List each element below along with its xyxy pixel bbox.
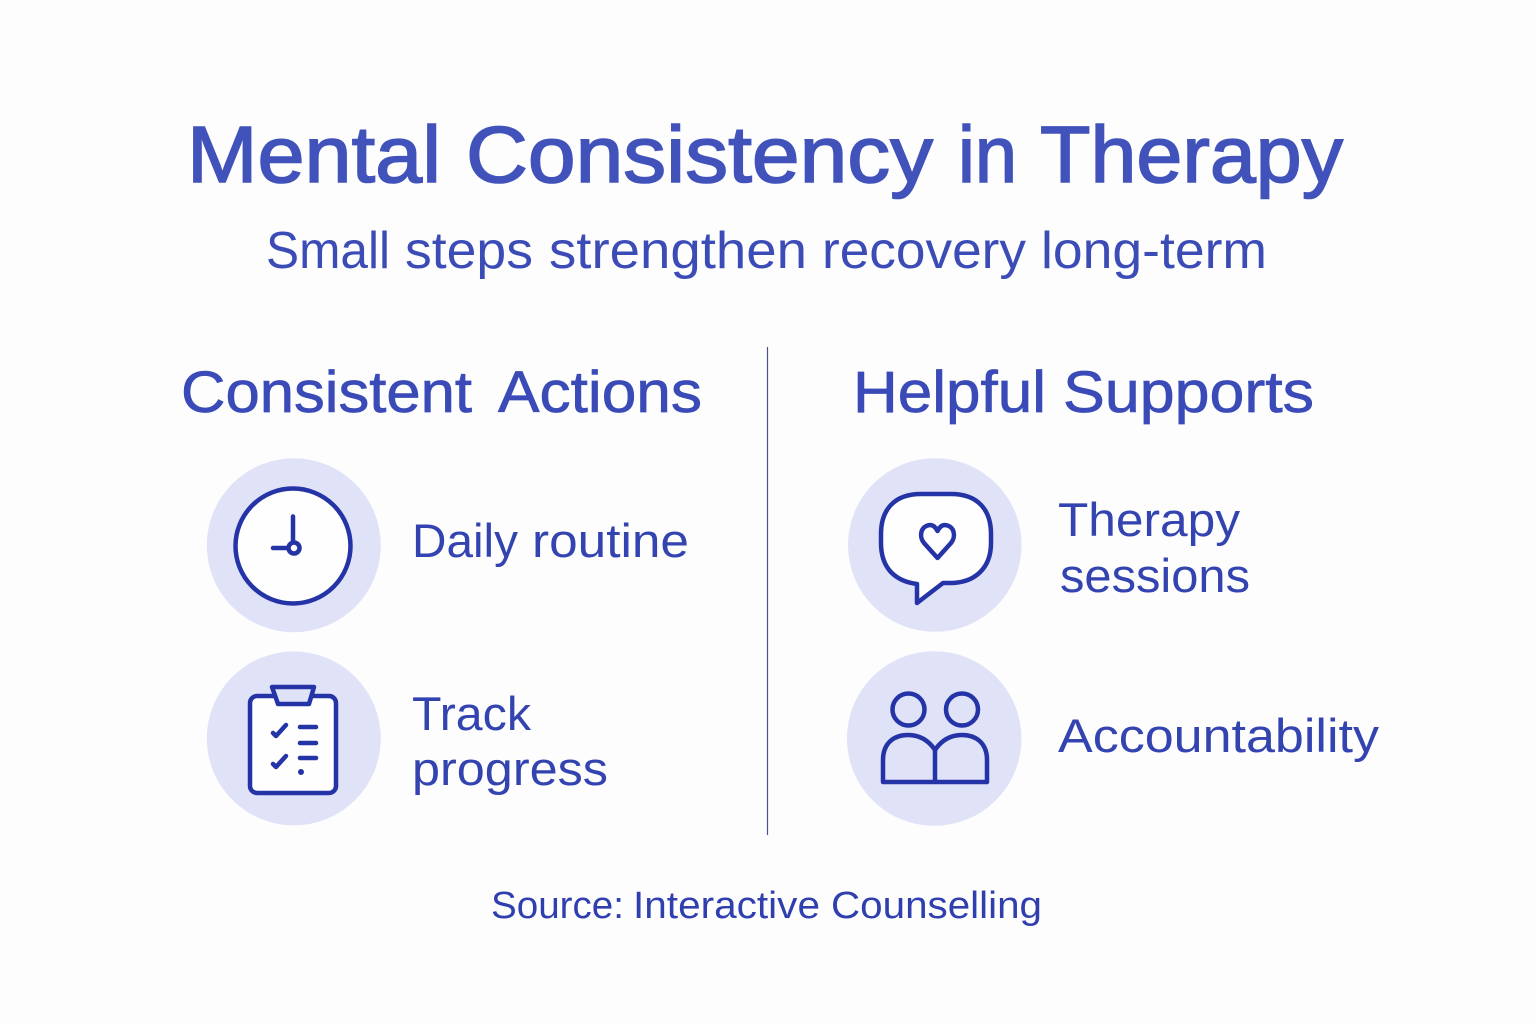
label: therapy sessions: Therapy	[1058, 493, 1241, 546]
title: in	[958, 110, 1017, 199]
label: daily routine: Daily	[412, 514, 519, 567]
title: Mental	[187, 110, 441, 199]
heading: consistent actions: Actions	[498, 360, 702, 425]
source: Interactive	[633, 885, 820, 927]
icon: speech bubble with heart	[848, 458, 1022, 632]
title: Therapy	[1040, 110, 1343, 199]
label: therapy sessions: sessions	[1060, 549, 1250, 602]
item: daily routine	[207, 458, 689, 632]
subtitle: steps	[405, 222, 533, 280]
item: therapy sessions	[848, 458, 1250, 632]
icon: clipboard checklist	[207, 651, 381, 825]
item: track progress	[207, 651, 608, 825]
label: track progress: progress	[412, 742, 608, 795]
heading: helpful supports: Helpful	[853, 360, 1046, 425]
item: accountability	[847, 651, 1380, 826]
subtitle: long-term	[1041, 222, 1267, 280]
icon: clock	[207, 458, 381, 632]
subtitle: recovery	[822, 222, 1026, 280]
panel: consistent actions	[181, 360, 702, 825]
panel: helpful supports	[847, 360, 1380, 826]
title: Consistency	[466, 110, 933, 199]
label: accountability: Accountability	[1058, 709, 1380, 762]
subtitle: strengthen	[549, 222, 807, 280]
icon: two people	[847, 651, 1022, 826]
heading: consistent actions: Consistent	[181, 360, 472, 425]
source: Counselling	[831, 885, 1042, 927]
source: Source:	[491, 885, 624, 927]
subtitle: Small	[266, 222, 390, 280]
heading: helpful supports: Supports	[1063, 360, 1314, 425]
label: track progress: Track	[412, 687, 532, 740]
label: daily routine: routine	[532, 514, 689, 567]
